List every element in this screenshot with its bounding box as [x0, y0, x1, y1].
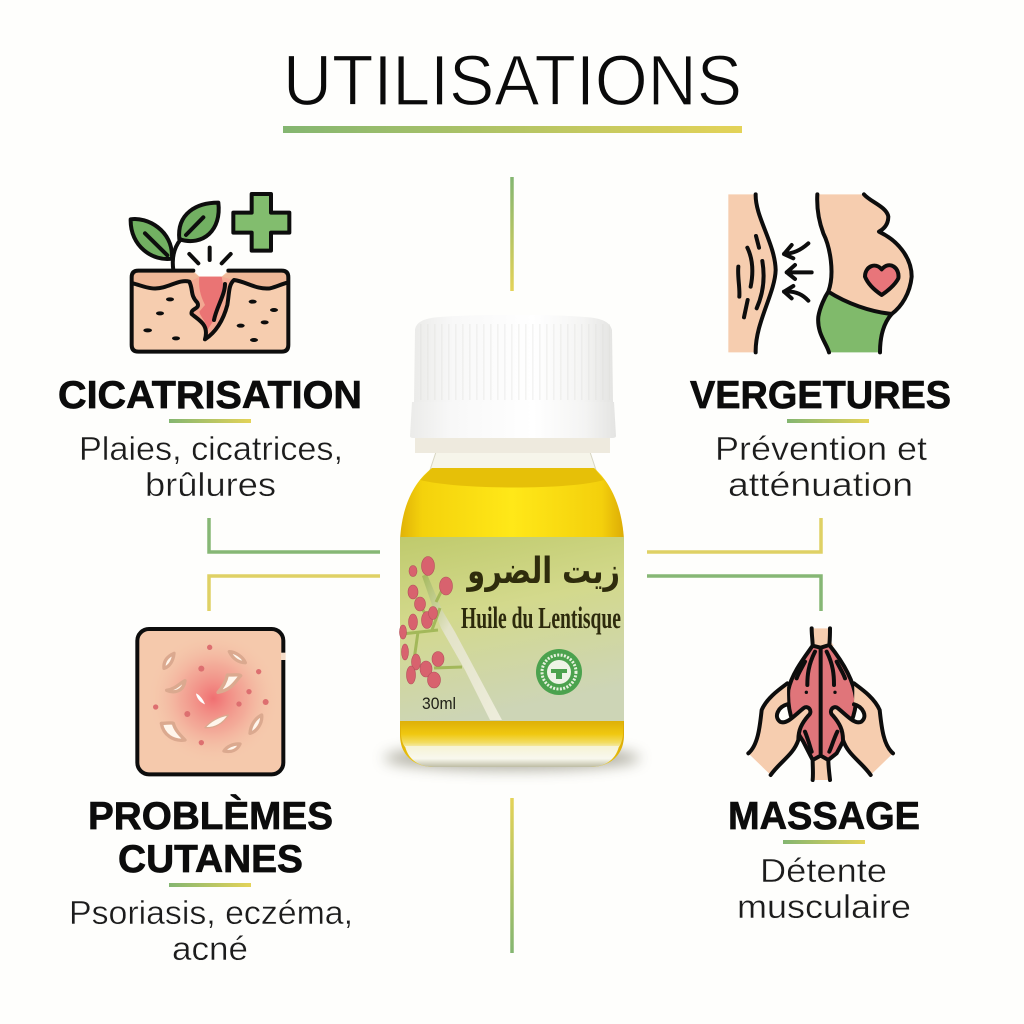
icon: stretch marks and pregnant belly [728, 194, 912, 352]
icon: healing skin [131, 194, 289, 352]
label arabic name: زيت الضرو [466, 550, 620, 592]
text: massage details: Détente [760, 852, 887, 889]
heading: problèmes cutanés: CUTANES [118, 838, 303, 881]
oil body [400, 468, 624, 767]
heading: problèmes cutanés: PROBLÈMES [88, 794, 333, 838]
text: cicatrisation details: brûlures [145, 466, 276, 503]
label [400, 537, 624, 721]
label french name: Huile du Lentisque [461, 600, 621, 635]
label volume: 30ml [422, 694, 456, 713]
text: cicatrisation details: Plaies, cicatrices, [79, 430, 343, 467]
text: cicatrisation details [79, 430, 343, 503]
connector: top [510, 177, 514, 291]
bottle shadow [384, 746, 640, 770]
text: problèmes cutanés details: Psoriasis, eczéma, [69, 894, 353, 931]
connector: massage [647, 576, 821, 611]
text: problèmes cutanés details [69, 894, 353, 967]
heading underline: vergetures [787, 419, 869, 423]
oil surface [420, 468, 604, 488]
connector: problèmes cutanés [209, 576, 380, 611]
heading underline: cicatrisation [169, 419, 251, 423]
cap inner ring [415, 438, 610, 453]
text: massage details [737, 852, 911, 925]
glass base [405, 746, 619, 767]
oil bottom band [401, 720, 623, 748]
heading: cicatrisation: CICATRISATION [58, 374, 362, 417]
title: UTILISATIONS [283, 42, 742, 121]
cap top ribbed [414, 315, 613, 402]
icon: skin rash [137, 629, 286, 774]
text: vergetures details [715, 430, 927, 503]
branch with berries [400, 556, 502, 720]
text: vergetures details: Prévention et [715, 430, 927, 467]
title underline [283, 126, 742, 133]
cap skirt [410, 402, 616, 438]
bottle neck [430, 452, 596, 470]
heading: massage: MASSAGE [728, 795, 920, 838]
product bottle [384, 315, 640, 770]
heading: vergetures: VERGETURES [690, 374, 951, 417]
connector: vergetures [647, 518, 821, 552]
connector: bottom [510, 798, 514, 953]
text: massage details: musculaire [737, 888, 911, 925]
text: problèmes cutanés details: acné [172, 930, 248, 967]
text: vergetures details: atténuation [728, 466, 913, 503]
heading underline: massage [783, 840, 865, 844]
heading underline: problèmes cutanés [169, 883, 251, 887]
connector: cicatrisation [209, 518, 380, 552]
icon: massage hands on muscle [748, 628, 893, 780]
cap ribs [418, 324, 610, 400]
label seal [536, 649, 582, 695]
heading: problèmes cutanés [88, 794, 333, 881]
